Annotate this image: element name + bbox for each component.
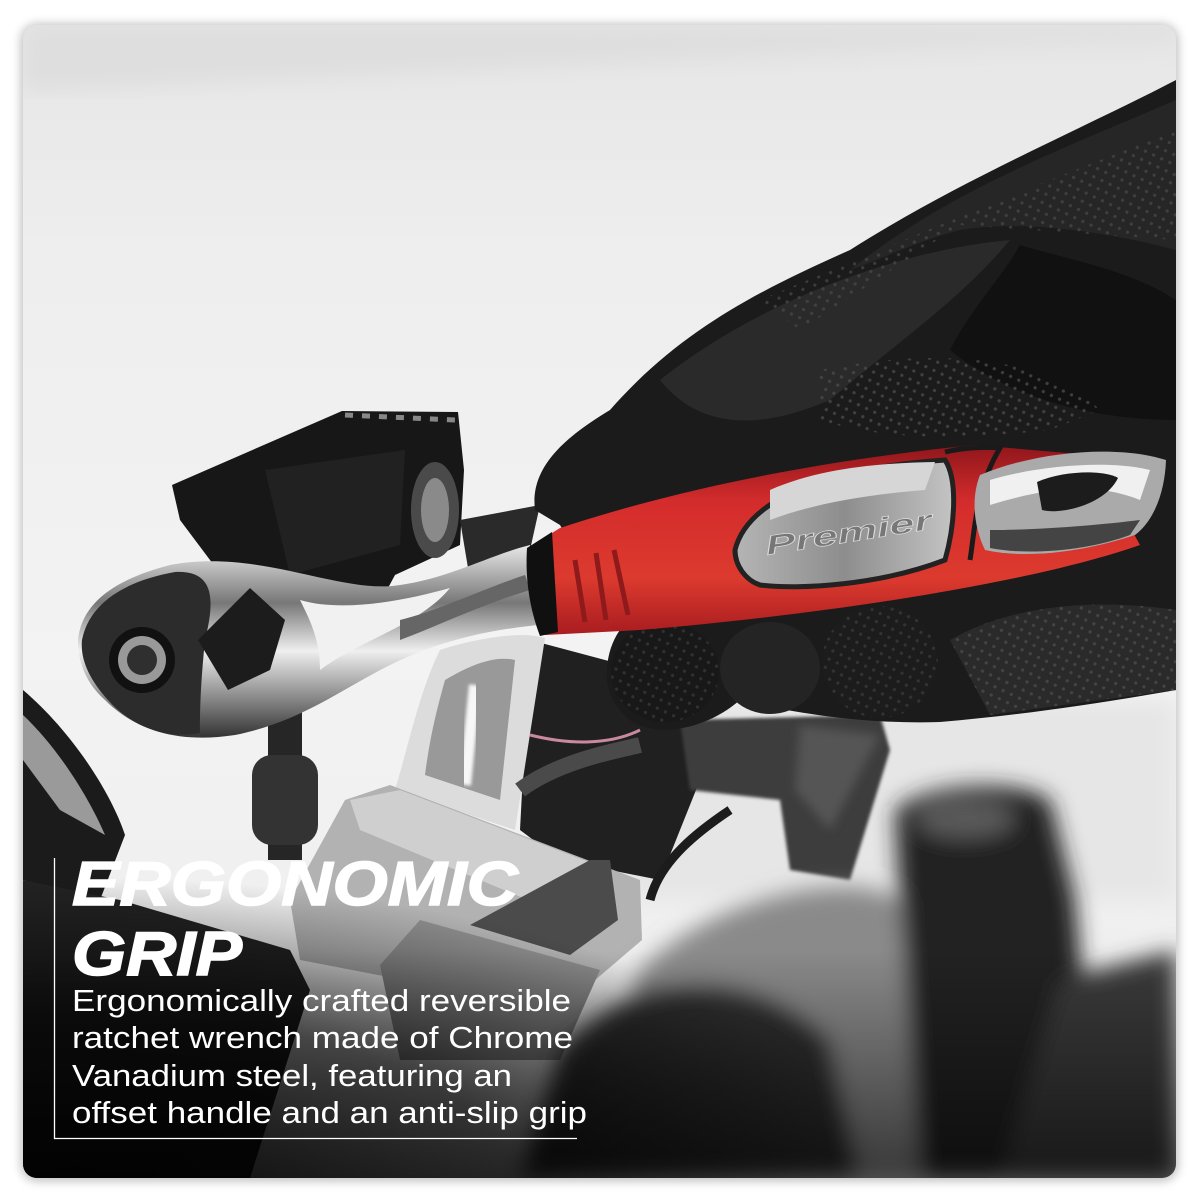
description text: offset handle and an anti-slip grip: [72, 1095, 587, 1130]
icon: chrome ratchet end: [975, 452, 1166, 554]
bottom shading: [23, 885, 782, 1178]
icon: motorcycle brake reservoir: [172, 411, 538, 586]
caption frame: [54, 858, 577, 1138]
icon: ratchet head and shaft: [78, 545, 538, 738]
icon: red handle: [527, 445, 1140, 636]
description text: Vanadium steel, featuring an: [72, 1058, 512, 1093]
icon: handlebar and cables: [23, 635, 890, 900]
brand mark on badge: Premier: [763, 505, 936, 561]
description text: ratchet wrench made of Chrome: [72, 1020, 573, 1055]
icon: switch block: [23, 785, 642, 1178]
heading: GRIP: [72, 920, 243, 989]
icon: gloved hand: [534, 80, 1176, 730]
description text: Ergonomically crafted reversible: [72, 983, 571, 1018]
icon: blurred foreground parts: [520, 786, 1176, 1178]
heading: ERGONOMIC: [72, 850, 519, 919]
heading: [72, 850, 519, 989]
description text: [72, 983, 587, 1130]
icon: chrome badge: [735, 447, 1000, 587]
